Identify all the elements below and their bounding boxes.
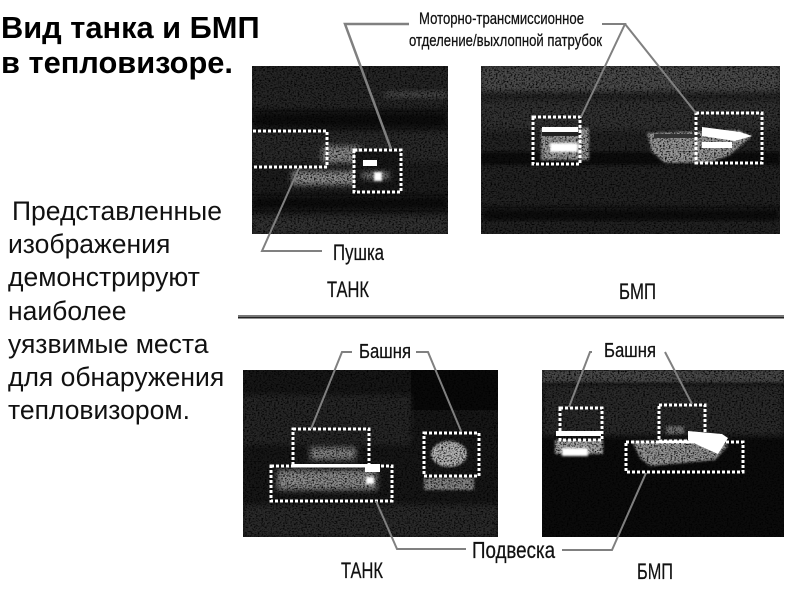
leader lines: [262, 24, 696, 550]
panel: BMP rear and side thermal image: [481, 66, 780, 234]
labels: Башня: [604, 340, 656, 362]
labels: Пушка: [333, 240, 385, 265]
labels: Башня: [359, 341, 411, 363]
labels: ТАНК: [327, 277, 369, 302]
labels: [327, 10, 673, 584]
title: в тепловизоре.: [1, 45, 233, 80]
text block: description: Представленные изображения демонстрируют наиболее уязвимые места для обнаружения тепловизором.: [8, 196, 224, 425]
dotted highlight boxes: [253, 113, 762, 501]
panel: tank rear/gun thermal image: [252, 66, 448, 234]
title: [1, 10, 260, 80]
labels: отделение/выхлопной патрубок: [409, 32, 603, 50]
labels: БМП: [619, 279, 656, 304]
panel: BMP turret and suspension thermal image: [542, 370, 784, 537]
thermal hot spots: [293, 127, 752, 484]
labels: ТАНК: [341, 558, 383, 583]
labels: БМП: [637, 559, 673, 584]
separator rule: [238, 315, 784, 318]
labels: Моторно-трансмиссионное: [419, 10, 584, 28]
panel: tank turret and suspension thermal image: [243, 370, 498, 537]
title: Вид танка и БМП: [1, 10, 260, 45]
infographic figure: [238, 12, 784, 580]
image grain overlay: [243, 66, 784, 537]
labels: Подвеска: [472, 537, 555, 563]
